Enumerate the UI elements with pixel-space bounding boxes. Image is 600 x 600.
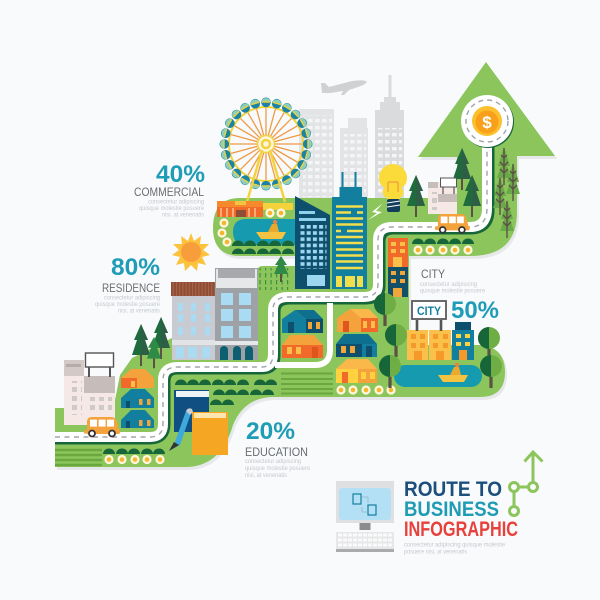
lower left houses: [121, 369, 154, 428]
route-shaped green arrow: [55, 62, 555, 467]
text block: city: consectetur adipiscing: [420, 281, 477, 288]
center houses: [282, 309, 378, 383]
route road: [55, 95, 514, 439]
text block: 80% residence: RESIDENCE: [102, 283, 160, 295]
text block: 20% education: [245, 418, 310, 479]
pine trees at residence: [132, 317, 170, 368]
icon: dollar coin: [472, 106, 502, 136]
icon: computer: [336, 481, 394, 552]
text block: 20% education: nisi, at venenatis: [245, 472, 287, 479]
upper flowers and bushes: [412, 238, 474, 255]
icon: sun: [172, 233, 210, 271]
title subtext: consectetur adipiscing quisque molestie: [404, 542, 505, 548]
ferris wheel: [220, 98, 312, 210]
dark glass office tower: [295, 196, 330, 289]
green strip with small pine: [258, 256, 290, 290]
skyline: grey background buildings: [299, 75, 404, 199]
title: ROUTE TO: [404, 478, 502, 501]
icon: bus on lower road: [84, 417, 120, 436]
commercial park: flowers and bushes: [217, 208, 294, 254]
round trees and pond: [374, 293, 502, 388]
text block: 40% commercial: 40%: [156, 161, 205, 188]
icon: books and pencil: [169, 390, 228, 455]
text block: 20% education: quisque molestie posuere: [245, 465, 310, 472]
bare trees on arrow stem: [493, 147, 520, 238]
title subtext: posuere nisi, at venenatis: [404, 548, 467, 556]
text block: 40% commercial: consectetur adipiscing: [148, 198, 204, 206]
commercial park: orange pavilion: [217, 201, 263, 217]
icon: dollar coin: $: [482, 113, 492, 132]
pine trees near arrow: [407, 148, 481, 217]
text block: 40% commercial: [134, 161, 205, 218]
residence buildings: [171, 268, 258, 360]
small building and billboard near arrow: [428, 178, 457, 214]
city buildings: [407, 322, 474, 360]
text block: 80% residence: 80%: [111, 254, 160, 281]
text block: 20% education: EDUCATION: [245, 447, 308, 459]
teal office tower: [332, 172, 367, 289]
text: 50%: 50%: [451, 297, 499, 324]
text block: city: quisque molestie posuere: [420, 288, 485, 294]
arrow soft shadow: [57, 65, 557, 470]
title subtext: [404, 542, 505, 556]
text block: city: [420, 269, 485, 294]
text block: 80% residence: [95, 254, 160, 314]
icon: bus on upper road: [435, 214, 470, 233]
text block: 40% commercial: quisque molestie posuere: [139, 205, 204, 212]
commercial park: pond with boat: [233, 219, 295, 245]
title: BUSINESS: [404, 498, 499, 521]
text block: 20% education: consectetur adipiscing: [245, 458, 301, 465]
title: INFOGRAPHIC: [404, 518, 518, 541]
orange and navy towers: [388, 238, 408, 297]
icon: light bulb: [379, 164, 407, 212]
icon: lightning bolt: [368, 203, 383, 220]
title: [404, 478, 518, 541]
text block: 20% education: 20%: [246, 418, 295, 445]
lower flowers: [336, 385, 396, 395]
text block: city: CITY: [421, 269, 445, 281]
text block: 40% commercial: nisi, at venenatis: [162, 212, 204, 218]
field stripes center: [281, 374, 333, 394]
text block: 40% commercial: COMMERCIAL: [134, 187, 205, 199]
icon: green route arrow: [510, 452, 542, 516]
lower left building and billboard: [64, 353, 115, 425]
city billboard: [412, 301, 446, 331]
city billboard: CITY: [417, 306, 441, 318]
field stripes and flowers bottom left: [55, 448, 165, 465]
text block: 80% residence: quisque molestie posuere: [95, 301, 160, 308]
text block: 80% residence: consectetur adipiscing: [104, 294, 160, 302]
icon: airplane: [321, 80, 367, 95]
education bushes: [175, 380, 277, 405]
text block: 80% residence: nisi, at venenatis: [118, 308, 160, 314]
